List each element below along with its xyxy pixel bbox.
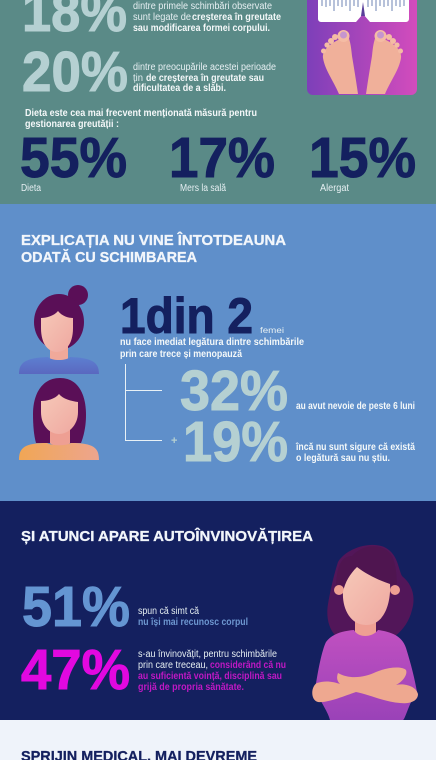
stat: 1 din 2: prin care trece și menopauză (120, 349, 242, 360)
icon: woman with long hair (19, 378, 99, 460)
stat: 17% gym: Mers la sală (180, 183, 226, 194)
text: diet intro (25, 108, 257, 130)
stat: 18%: sau modificarea formei corpului. (133, 23, 270, 34)
panel: self blame (0, 501, 436, 720)
stat: 1 din 2: 1din 2 (120, 288, 253, 344)
stat: plus 19% (171, 410, 415, 474)
panel: medical support (0, 720, 436, 760)
stat: 47%: au suficientă voință, disciplină sau (138, 671, 282, 682)
stat: 20%: țin (133, 73, 143, 84)
heading: explanation (21, 231, 287, 266)
icon: feet on a scale (307, 0, 417, 95)
stat: 51%: nu își mai recunosc corpul (138, 617, 248, 628)
stat: 55% diet: Dieta (21, 183, 41, 194)
icon: woman with bun (19, 285, 99, 374)
stat: 51% (22, 575, 248, 639)
stat: 47%: considerând că nu (210, 660, 286, 671)
stat: 18% (22, 0, 281, 44)
text: diet intro: gestionarea greutății : (25, 119, 119, 130)
stat: 15% running: 15% (309, 126, 416, 190)
stat: plus 19%: o legătură sau nu știu. (296, 453, 390, 464)
heading: explanation: EXPLICAȚIA NU VINE ÎNTOTDEAUNA (21, 231, 287, 249)
stat: 47% (21, 638, 286, 702)
stat: 20%: de creșterea în greutate sau (146, 73, 264, 84)
stat: 17% gym: 17% (169, 126, 275, 190)
stat: 51%: 51% (22, 575, 130, 639)
stat: plus 19%: 19% (183, 410, 288, 474)
bracket connector (126, 364, 162, 440)
stat: 1 din 2: femei (260, 326, 284, 335)
stat: 32%: au avut nevoie de peste 6 luni (296, 401, 415, 412)
stat: 32%: 32% (180, 359, 288, 423)
stat: 18%: creșterea în greutate (192, 12, 281, 23)
panel: explanation (0, 204, 436, 501)
stat: 20%: dintre preocupările acestei perioade (133, 62, 276, 73)
stat: 47%: s-au învinovățit, pentru schimbările (138, 649, 277, 660)
icon: woman with crossed arms (312, 545, 418, 720)
stat: 1 din 2 (120, 288, 304, 360)
stat: plus 19%: + (171, 435, 177, 447)
stat: 51%: spun că simt că (138, 606, 199, 617)
stat: 20% (22, 40, 276, 104)
stat: 47%: grijă de propria sănătate. (138, 682, 244, 693)
stat: 18%: sunt legate de (133, 12, 191, 23)
stat: 32% (180, 359, 415, 423)
stat: 47%: prin care treceau, (138, 660, 208, 671)
text: diet intro: Dieta este cea mai frecvent menționată măsură pentru (25, 108, 257, 119)
stat: 20%: dificultatea de a slăbi. (133, 83, 226, 94)
stat: 15% running: Alergat (320, 183, 349, 194)
stat: 18%: dintre primele schimbări observate (133, 1, 272, 12)
heading: explanation: ODATĂ CU SCHIMBAREA (21, 249, 198, 266)
stat: plus 19%: încă nu sunt sigure că există (295, 442, 415, 453)
panel: weight and diet (0, 0, 436, 205)
heading: self blame: ȘI ATUNCI APARE AUTOÎNVINOVĂȚIREA (21, 527, 314, 545)
stat: 55% diet: 55% (20, 126, 127, 190)
stat: 1 din 2: nu face imediat legătura dintre schimbările (120, 337, 304, 348)
stat: 20%: 20% (22, 40, 128, 104)
stat: 47%: 47% (21, 638, 130, 702)
